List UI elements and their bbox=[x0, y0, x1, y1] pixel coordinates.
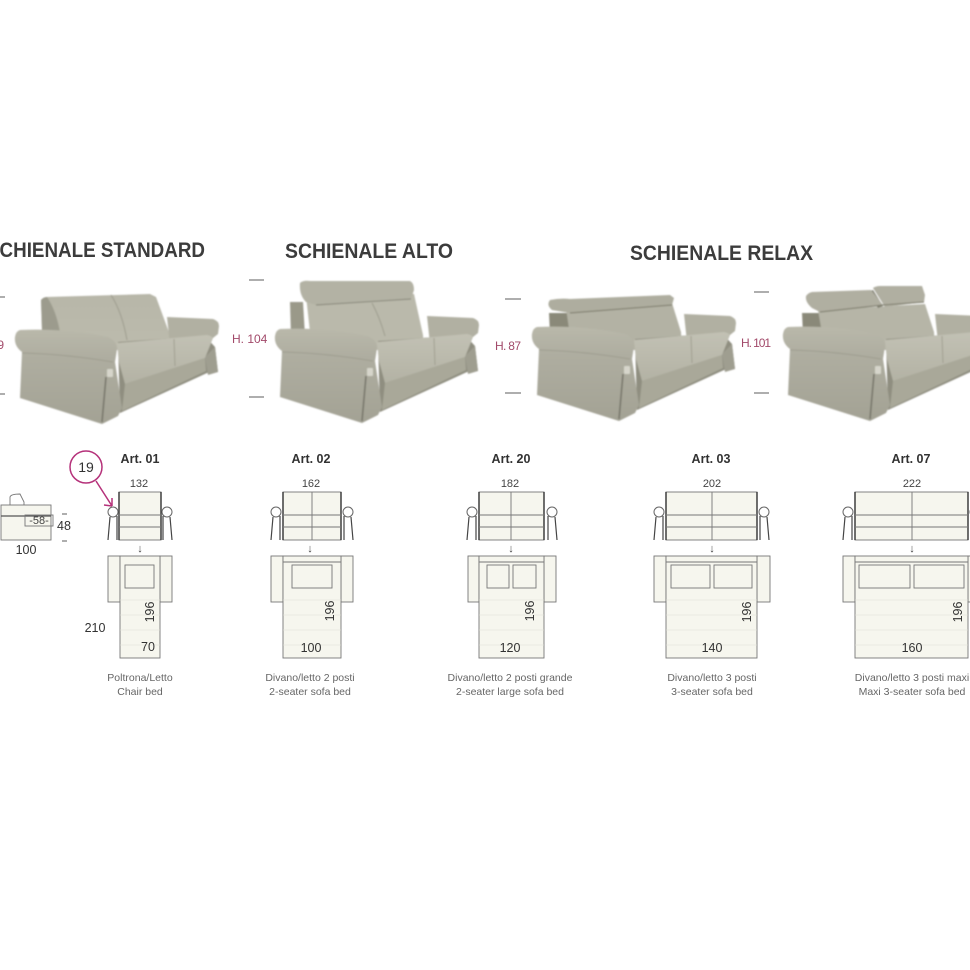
product: Art. 07 maxi three-seater sofa bed: Maxi 3-seater sofa bed bbox=[859, 686, 966, 698]
product: Art. 07 maxi three-seater sofa bed: 196 bbox=[951, 602, 965, 622]
product: Art. 07 maxi three-seater sofa bed: Art. 07 bbox=[892, 452, 930, 466]
product: Art. 03 three-seater sofa bed: Art. 03 bbox=[692, 452, 730, 466]
height marker: standard bbox=[0, 297, 5, 394]
product: Art. 03 three-seater sofa bed: 3-seater sofa bed bbox=[671, 686, 753, 698]
sofa: relax with long headrest bbox=[532, 295, 736, 421]
product: Art. 01 chair bed: Poltrona/Letto bbox=[107, 672, 173, 684]
product: Art. 03 three-seater sofa bed: 196 bbox=[740, 602, 754, 622]
product: Art. 02 two-seater sofa bed: 2-seater sofa bed bbox=[269, 686, 351, 698]
product: Art. 03 three-seater sofa bed: 140 bbox=[702, 641, 722, 655]
callout: 19 with arrow bbox=[70, 451, 112, 506]
callout: 19 with arrow: 19 bbox=[78, 459, 94, 475]
product: Art. 20 two-seater large sofa bed: 182 bbox=[501, 478, 519, 490]
height marker: relax two bbox=[741, 292, 771, 393]
front view bbox=[843, 492, 970, 540]
product: Art. 02 two-seater sofa bed: ↓ bbox=[307, 543, 313, 555]
product: Art. 02 two-seater sofa bed: 196 bbox=[323, 601, 337, 621]
product: Art. 07 maxi three-seater sofa bed: 222 bbox=[903, 478, 921, 490]
product: Art. 01 chair bed: 70 bbox=[141, 640, 155, 654]
product: Art. 20 two-seater large sofa bed: Divano/letto 2 posti grande bbox=[448, 672, 573, 684]
product: Art. 07 maxi three-seater sofa bed: Divano/letto 3 posti maxi bbox=[855, 672, 969, 684]
product: Art. 07 maxi three-seater sofa bed: ↓ bbox=[909, 543, 915, 555]
heading: schienale alto: SCHIENALE ALTO bbox=[285, 240, 453, 263]
height marker: alto: H. 104 bbox=[232, 332, 268, 346]
product: Art. 02 two-seater sofa bed: 162 bbox=[302, 478, 320, 490]
product: Art. 01 chair bed bbox=[85, 452, 173, 698]
product: Art. 01 chair bed: ↓ bbox=[137, 543, 143, 555]
bed plan bbox=[843, 556, 970, 658]
product: Art. 03 three-seater sofa bed: Divano/letto 3 posti bbox=[667, 672, 757, 684]
product: Art. 20 two-seater large sofa bed: ↓ bbox=[508, 543, 514, 555]
product: Art. 03 three-seater sofa bed: 202 bbox=[703, 478, 721, 490]
product: Art. 20 two-seater large sofa bed: 120 bbox=[500, 641, 520, 655]
product: Art. 01 chair bed: Art. 01 bbox=[121, 452, 159, 466]
product: Art. 01 chair bed: Chair bed bbox=[117, 686, 163, 698]
height marker: relax one: H. 87 bbox=[495, 339, 521, 353]
height marker: relax two: H. 101 bbox=[741, 336, 771, 350]
product: Art. 20 two-seater large sofa bed: Art. 20 bbox=[492, 452, 530, 466]
side view diagram: 48 bbox=[57, 519, 71, 533]
front view bbox=[654, 492, 769, 540]
sofa: alto with high back bbox=[275, 281, 479, 423]
heading: schienale relax: SCHIENALE RELAX bbox=[630, 242, 813, 265]
bed plan bbox=[108, 556, 172, 658]
product: Art. 20 two-seater large sofa bed: 196 bbox=[523, 601, 537, 621]
bed plan bbox=[468, 556, 556, 658]
product: Art. 02 two-seater sofa bed bbox=[265, 452, 355, 698]
product: Art. 02 two-seater sofa bed: Divano/letto 2 posti bbox=[265, 672, 355, 684]
product: Art. 07 maxi three-seater sofa bed: 160 bbox=[902, 641, 922, 655]
product: Art. 01 chair bed: 210 bbox=[85, 621, 105, 635]
height marker: alto bbox=[232, 280, 268, 397]
product: Art. 01 chair bed: 196 bbox=[143, 602, 157, 622]
front view bbox=[271, 492, 353, 540]
product: Art. 20 two-seater large sofa bed bbox=[448, 452, 573, 698]
side view diagram: -58- bbox=[29, 515, 49, 527]
product: Art. 01 chair bed: 132 bbox=[130, 478, 148, 490]
bed plan bbox=[654, 556, 770, 658]
sofa: relax with two headrests bbox=[783, 286, 970, 421]
front view bbox=[108, 492, 172, 540]
sofa: standard back bbox=[15, 294, 219, 424]
side view diagram: 100 bbox=[16, 543, 36, 557]
product: Art. 03 three-seater sofa bed: ↓ bbox=[709, 543, 715, 555]
height marker: relax one bbox=[495, 299, 521, 393]
product: Art. 03 three-seater sofa bed bbox=[654, 452, 770, 698]
product: Art. 07 maxi three-seater sofa bed bbox=[843, 452, 970, 698]
side view diagram bbox=[1, 494, 71, 557]
product: Art. 02 two-seater sofa bed: 100 bbox=[301, 641, 321, 655]
bed plan bbox=[271, 556, 353, 658]
product: Art. 02 two-seater sofa bed: Art. 02 bbox=[292, 452, 330, 466]
product: Art. 20 two-seater large sofa bed: 2-seater large sofa bed bbox=[456, 686, 564, 698]
front view bbox=[467, 492, 557, 540]
